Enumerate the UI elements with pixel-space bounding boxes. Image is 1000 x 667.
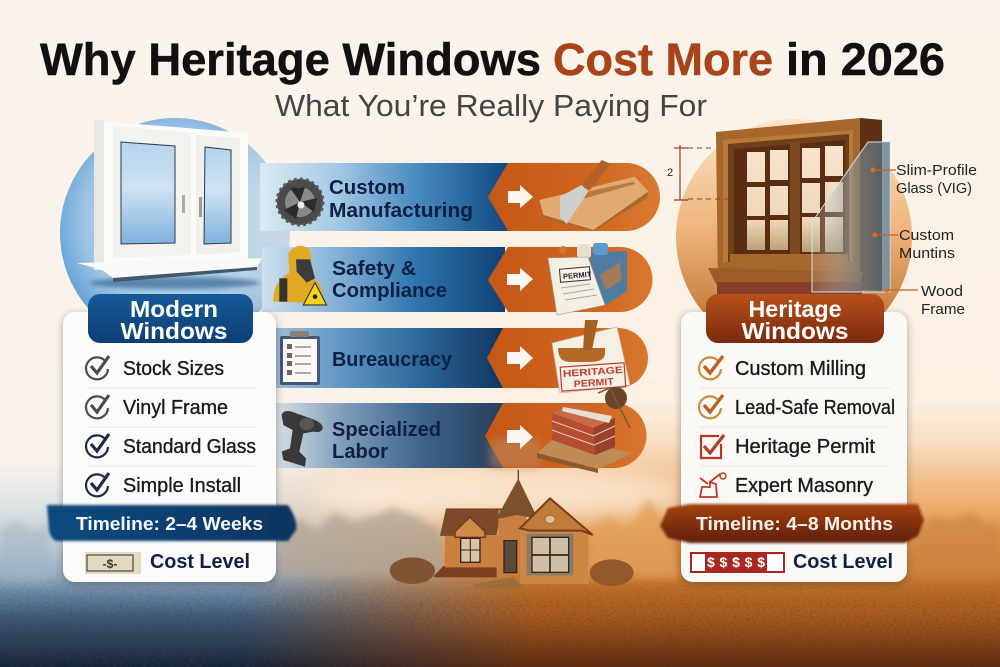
item: custom milling: Custom Milling — [735, 358, 866, 380]
cost level: -$- — [103, 557, 117, 571]
callout: custom muntins: Muntins — [899, 245, 955, 262]
cost level: Cost Level — [150, 551, 250, 573]
header: Windows — [742, 318, 848, 344]
panel: modern windows — [47, 294, 296, 582]
cost level: $$$$$ — [707, 554, 765, 570]
item: simple install — [86, 473, 241, 497]
icon: clipboard — [280, 331, 320, 385]
house illustration — [390, 470, 634, 589]
title: Cost More — [553, 34, 773, 85]
icon: saw gear — [277, 179, 323, 225]
panel: specialized labor: Labor — [332, 440, 388, 463]
item: expert masonry: Expert Masonry — [735, 475, 873, 497]
heading: Bureaucracy — [332, 348, 453, 371]
panel: safety and compliance — [262, 243, 652, 315]
meadow grain — [0, 570, 1000, 667]
panel: specialized labor — [275, 387, 646, 473]
arrow — [507, 346, 533, 370]
item: lead-safe removal — [699, 395, 895, 419]
heading: Specialized — [332, 418, 441, 441]
icon: heritage permit stamp: HERITAGE — [563, 365, 623, 380]
arrow — [508, 185, 533, 208]
title: Why Heritage Windows — [40, 34, 541, 85]
cost level — [691, 551, 893, 573]
item: stock sizes: Stock Sizes — [123, 358, 224, 380]
timeline ribbon — [47, 505, 296, 541]
callout: wood frame — [884, 283, 965, 318]
panel: custom manufacturing: Manufacturing — [329, 199, 473, 222]
icon: heritage permit stamp — [552, 320, 630, 393]
item: heritage permit: Heritage Permit — [735, 436, 875, 458]
header — [88, 294, 253, 344]
tree line right — [585, 498, 1000, 578]
item: simple install: Simple Install — [123, 475, 241, 497]
panel: bureaucracy — [275, 320, 648, 393]
orange backdrop circle — [676, 119, 912, 355]
window panes — [747, 146, 843, 252]
icon: heritage permit stamp: PERMIT — [573, 376, 614, 390]
callout: slim-profile glass — [870, 162, 977, 197]
arrow — [507, 268, 533, 291]
icon: permit and tape — [548, 243, 627, 315]
header: Modern — [130, 296, 218, 322]
header: Windows — [120, 318, 228, 344]
tree line left — [0, 508, 445, 582]
background — [0, 322, 1000, 667]
panel: safety and compliance: Compliance — [332, 279, 447, 302]
item: vinyl frame: Vinyl Frame — [123, 397, 228, 419]
callout: wood frame: Frame — [921, 301, 965, 318]
item: vinyl frame — [86, 395, 228, 419]
slim-profile glass pane — [812, 142, 890, 292]
icon: plank and scraper — [539, 160, 648, 231]
timeline ribbon: Timeline: 2–4 Weeks — [76, 513, 263, 534]
item: standard glass — [86, 434, 256, 458]
item: stock sizes — [86, 356, 224, 380]
modern vinyl window — [77, 120, 262, 289]
header — [706, 294, 884, 344]
cost level: Cost Level — [793, 551, 893, 573]
callout: slim-profile glass: Slim-Profile — [896, 162, 977, 179]
subtitle: What You’re Really Paying For — [275, 88, 707, 123]
item: standard glass: Standard Glass — [123, 436, 256, 458]
dimension marker — [667, 145, 730, 200]
timeline ribbon: Timeline: 4–8 Months — [696, 513, 893, 534]
cost level — [85, 551, 250, 574]
heading: Custom — [329, 176, 405, 199]
timeline ribbon — [660, 504, 924, 543]
item: lead-safe removal: Lead-Safe Removal — [735, 397, 895, 419]
heritage wood window — [708, 118, 890, 296]
callout: custom muntins — [872, 227, 955, 262]
icon: brick wall — [537, 387, 633, 473]
heading: Safety & — [332, 257, 416, 280]
shrubs — [390, 557, 634, 586]
arrow — [507, 425, 533, 449]
callout: slim-profile glass: Glass (VIG) — [896, 180, 972, 197]
icon: hazmat suit — [273, 246, 327, 305]
blue backdrop circle — [60, 118, 290, 312]
callout: custom muntins: Custom — [899, 227, 954, 244]
header: Heritage — [748, 296, 842, 322]
callout: wood frame: Wood — [921, 283, 963, 300]
panel: custom manufacturing — [260, 160, 660, 231]
icon: permit and tape: PERMIT — [563, 270, 592, 281]
icon: power drill — [282, 411, 323, 467]
panel: heritage windows — [660, 294, 924, 582]
title: in 2026 — [786, 34, 945, 85]
dimension marker: 2 — [667, 167, 673, 179]
title — [40, 34, 945, 85]
